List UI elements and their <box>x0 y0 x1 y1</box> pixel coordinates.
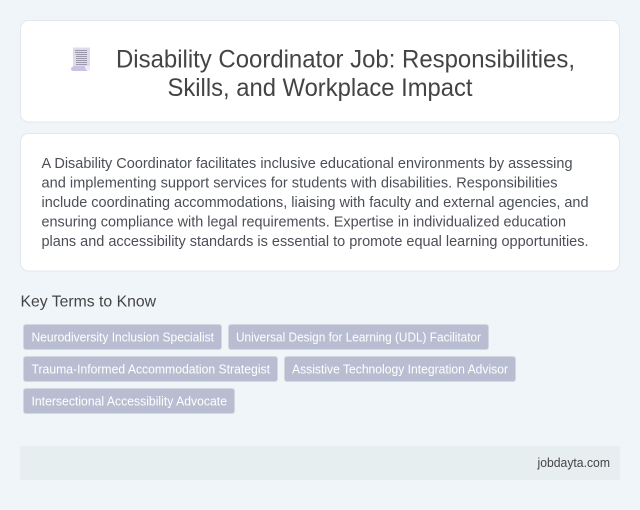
footer: jobdayta.com <box>537 456 610 470</box>
tag: neurodiversity: Neurodiversity Inclusion Specialist <box>32 330 215 344</box>
text block: description: and implementing support services for students with disabilities. Responsibilities <box>42 176 558 192</box>
heading: key terms: Key Terms to Know <box>20 294 156 311</box>
tag: neurodiversity <box>24 324 222 350</box>
text block: description: include coordinating accommodations, liaising with faculty and external agencies, and <box>42 195 588 211</box>
tag: UDL: Universal Design for Learning (UDL) Facilitator <box>236 330 481 344</box>
tag: assistive technology <box>284 356 516 382</box>
tag: assistive technology: Assistive Technology Integration Advisor <box>292 362 508 376</box>
icon: document scroll <box>71 48 90 71</box>
title: Disability Coordinator Job: Responsibilities, <box>116 46 575 74</box>
tag list: key terms <box>24 324 516 414</box>
tag: intersectional <box>24 388 234 414</box>
text block: description: ensuring compliance with legal requirements. Expertise in individualized education <box>42 214 566 230</box>
tag: trauma-informed <box>24 356 278 382</box>
panel: description card <box>20 134 620 271</box>
text block: description: A Disability Coordinator facilitates inclusive educational environments by assessing <box>42 156 572 172</box>
title: Skills, and Workplace Impact <box>168 74 473 102</box>
text block: description: plans and accessibility standards is essential to promote equal learning opportunities. <box>42 234 588 250</box>
footer <box>20 446 620 480</box>
tag: UDL <box>228 324 488 350</box>
tag: trauma-informed: Trauma-Informed Accommodation Strategist <box>32 362 271 376</box>
title <box>116 46 575 102</box>
panel: title card <box>20 20 620 122</box>
text block: description <box>42 156 588 250</box>
tag: intersectional: Intersectional Accessibility Advocate <box>32 394 227 408</box>
